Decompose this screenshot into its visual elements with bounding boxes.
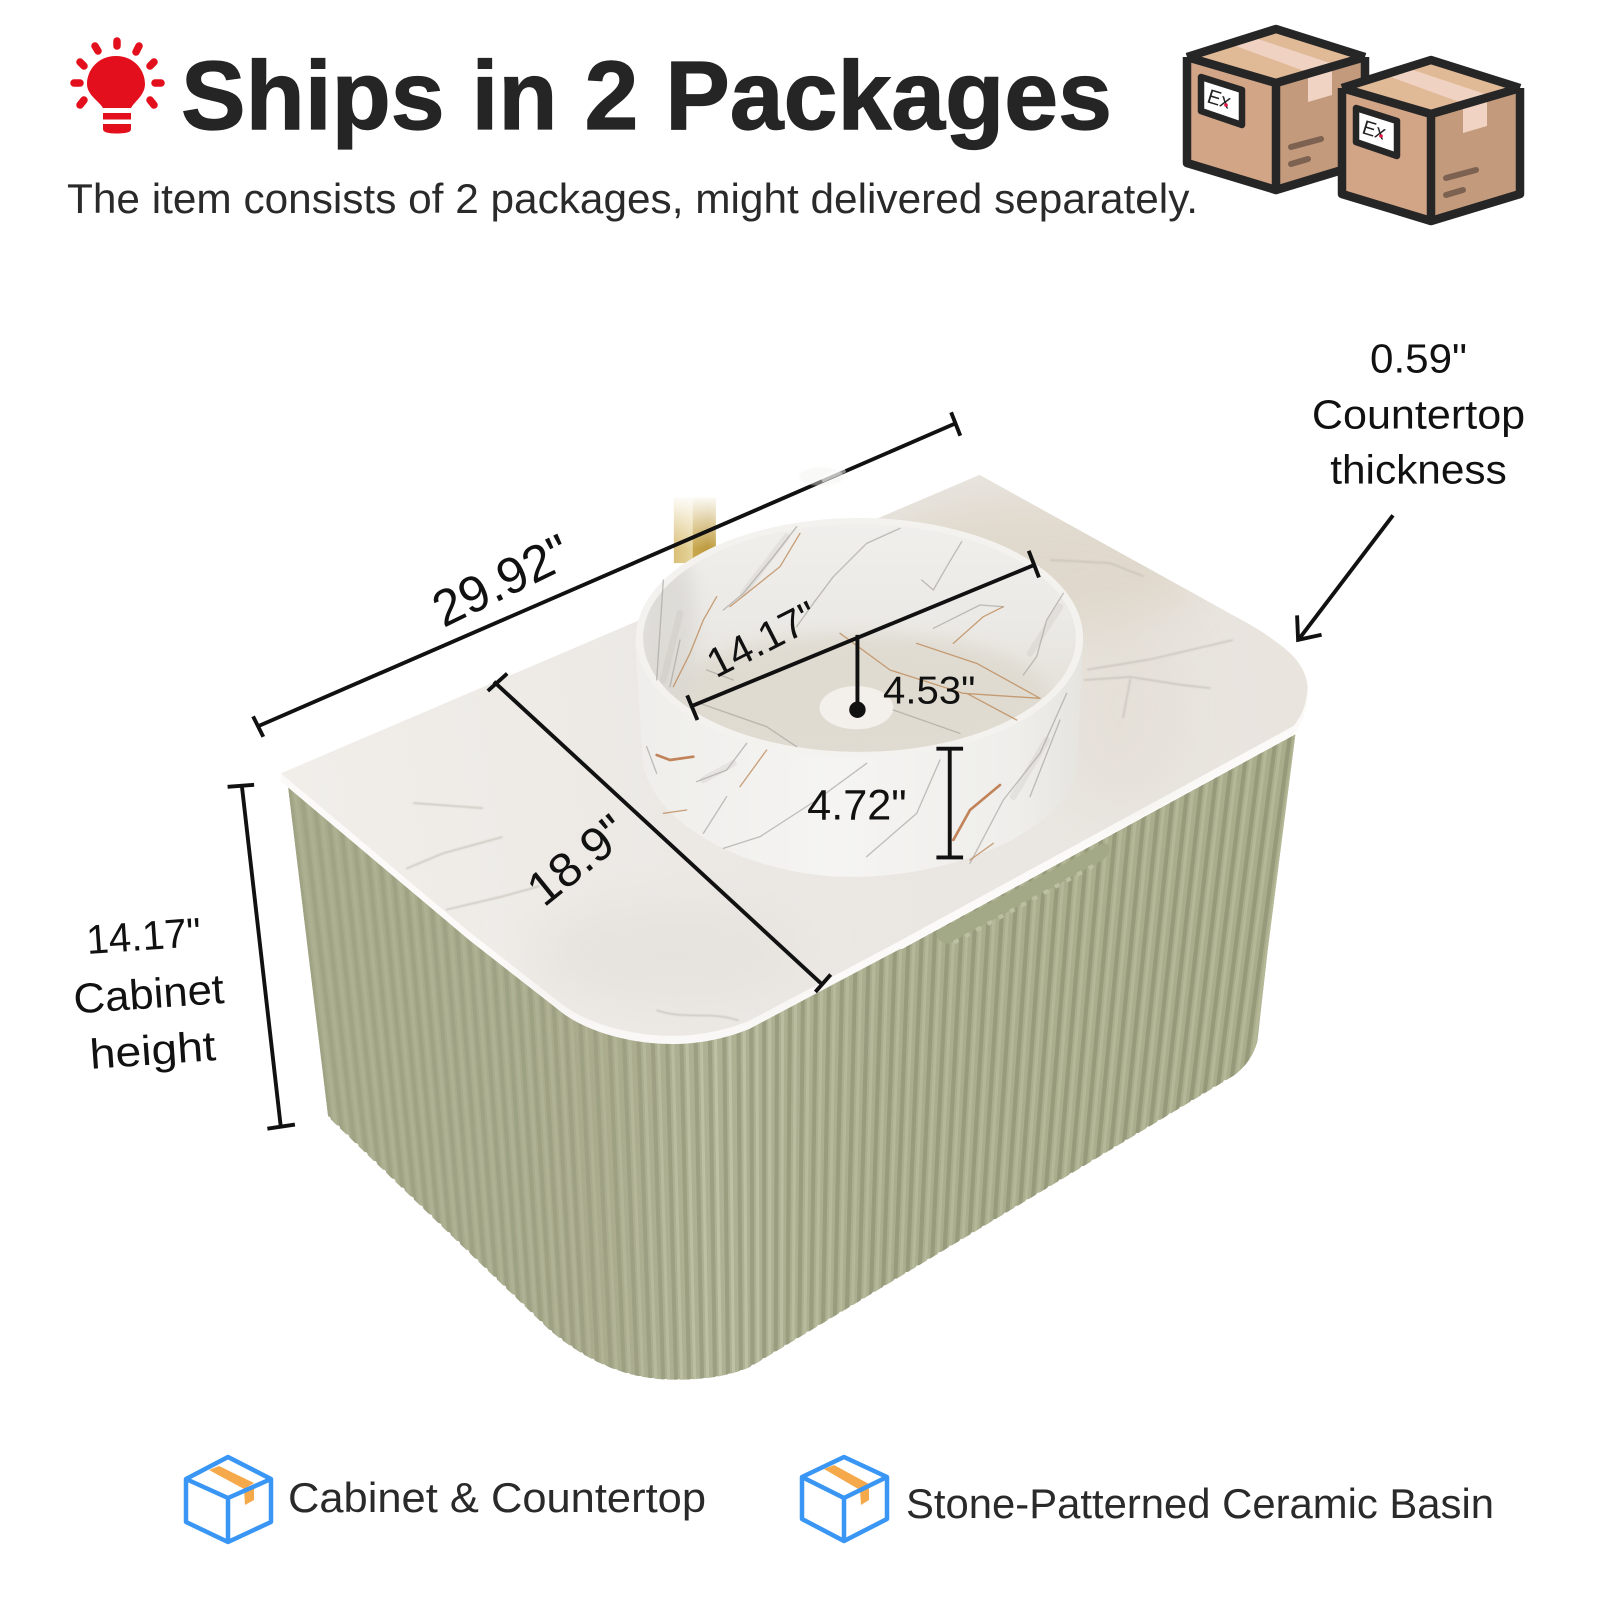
icon: blue package [186,1457,271,1542]
icon: red light bulb [74,41,161,134]
icon: box one: Ex [1205,86,1233,114]
label: countertop thickness [1312,335,1525,493]
drawer pull recess [936,843,1109,944]
dimension: 14.17 in basin diameter [687,551,1039,720]
dimension: 4.72 in basin height: 4.72" [807,781,907,829]
dimension: 14.17 in basin diameter: 14.17" [699,592,825,687]
marble vessel basin [635,518,1083,877]
subtitle: The item consists of 2 packages, might delivered separately. [67,175,1198,222]
dimension: cabinet height line [228,785,295,1129]
icon: box two: Ex [1360,117,1388,145]
cabinet body with fluted front [288,734,1296,1380]
arrow: to countertop edge [1297,515,1393,640]
dimension: 4.53 in basin depth [849,635,975,718]
dimension: 18.9 in depth [488,674,831,992]
icon: box one [1187,29,1365,190]
dimension: 4.53 in basin depth: 4.53" [883,670,975,713]
label: cabinet height: Cabinet [72,965,226,1022]
dimension: 29.92 in width [253,412,960,737]
legend: cabinet and countertop [186,1457,706,1542]
icon: two cardboard boxes [1187,29,1520,221]
dimension: 4.72 in basin height [807,749,963,857]
label: countertop thickness: 0.59" [1370,335,1467,381]
dimension: 18.9 in depth: 18.9" [517,805,638,917]
title: Ships in 2 Packages [181,41,1112,150]
legend: ceramic basin: Stone-Patterned Ceramic Basin [906,1480,1494,1527]
gold faucet [672,492,718,563]
marble countertop [281,467,1308,1044]
icon: blue package [802,1457,887,1541]
legend: cabinet and countertop: Cabinet & Countertop [288,1474,706,1521]
label: cabinet height [68,908,230,1079]
basin marble veins [647,527,1067,863]
dimension: 29.92 in width: 29.92" [423,523,580,638]
vanity illustration with dimensions [68,335,1525,1436]
label: countertop thickness: Countertop [1312,392,1525,438]
label: cabinet height: 14.17" [85,909,203,963]
icon: box two [1342,60,1520,221]
label: cabinet height: height [88,1022,218,1078]
basin drain [819,686,893,729]
label: countertop thickness: thickness [1330,447,1507,493]
legend: ceramic basin [802,1457,1494,1541]
